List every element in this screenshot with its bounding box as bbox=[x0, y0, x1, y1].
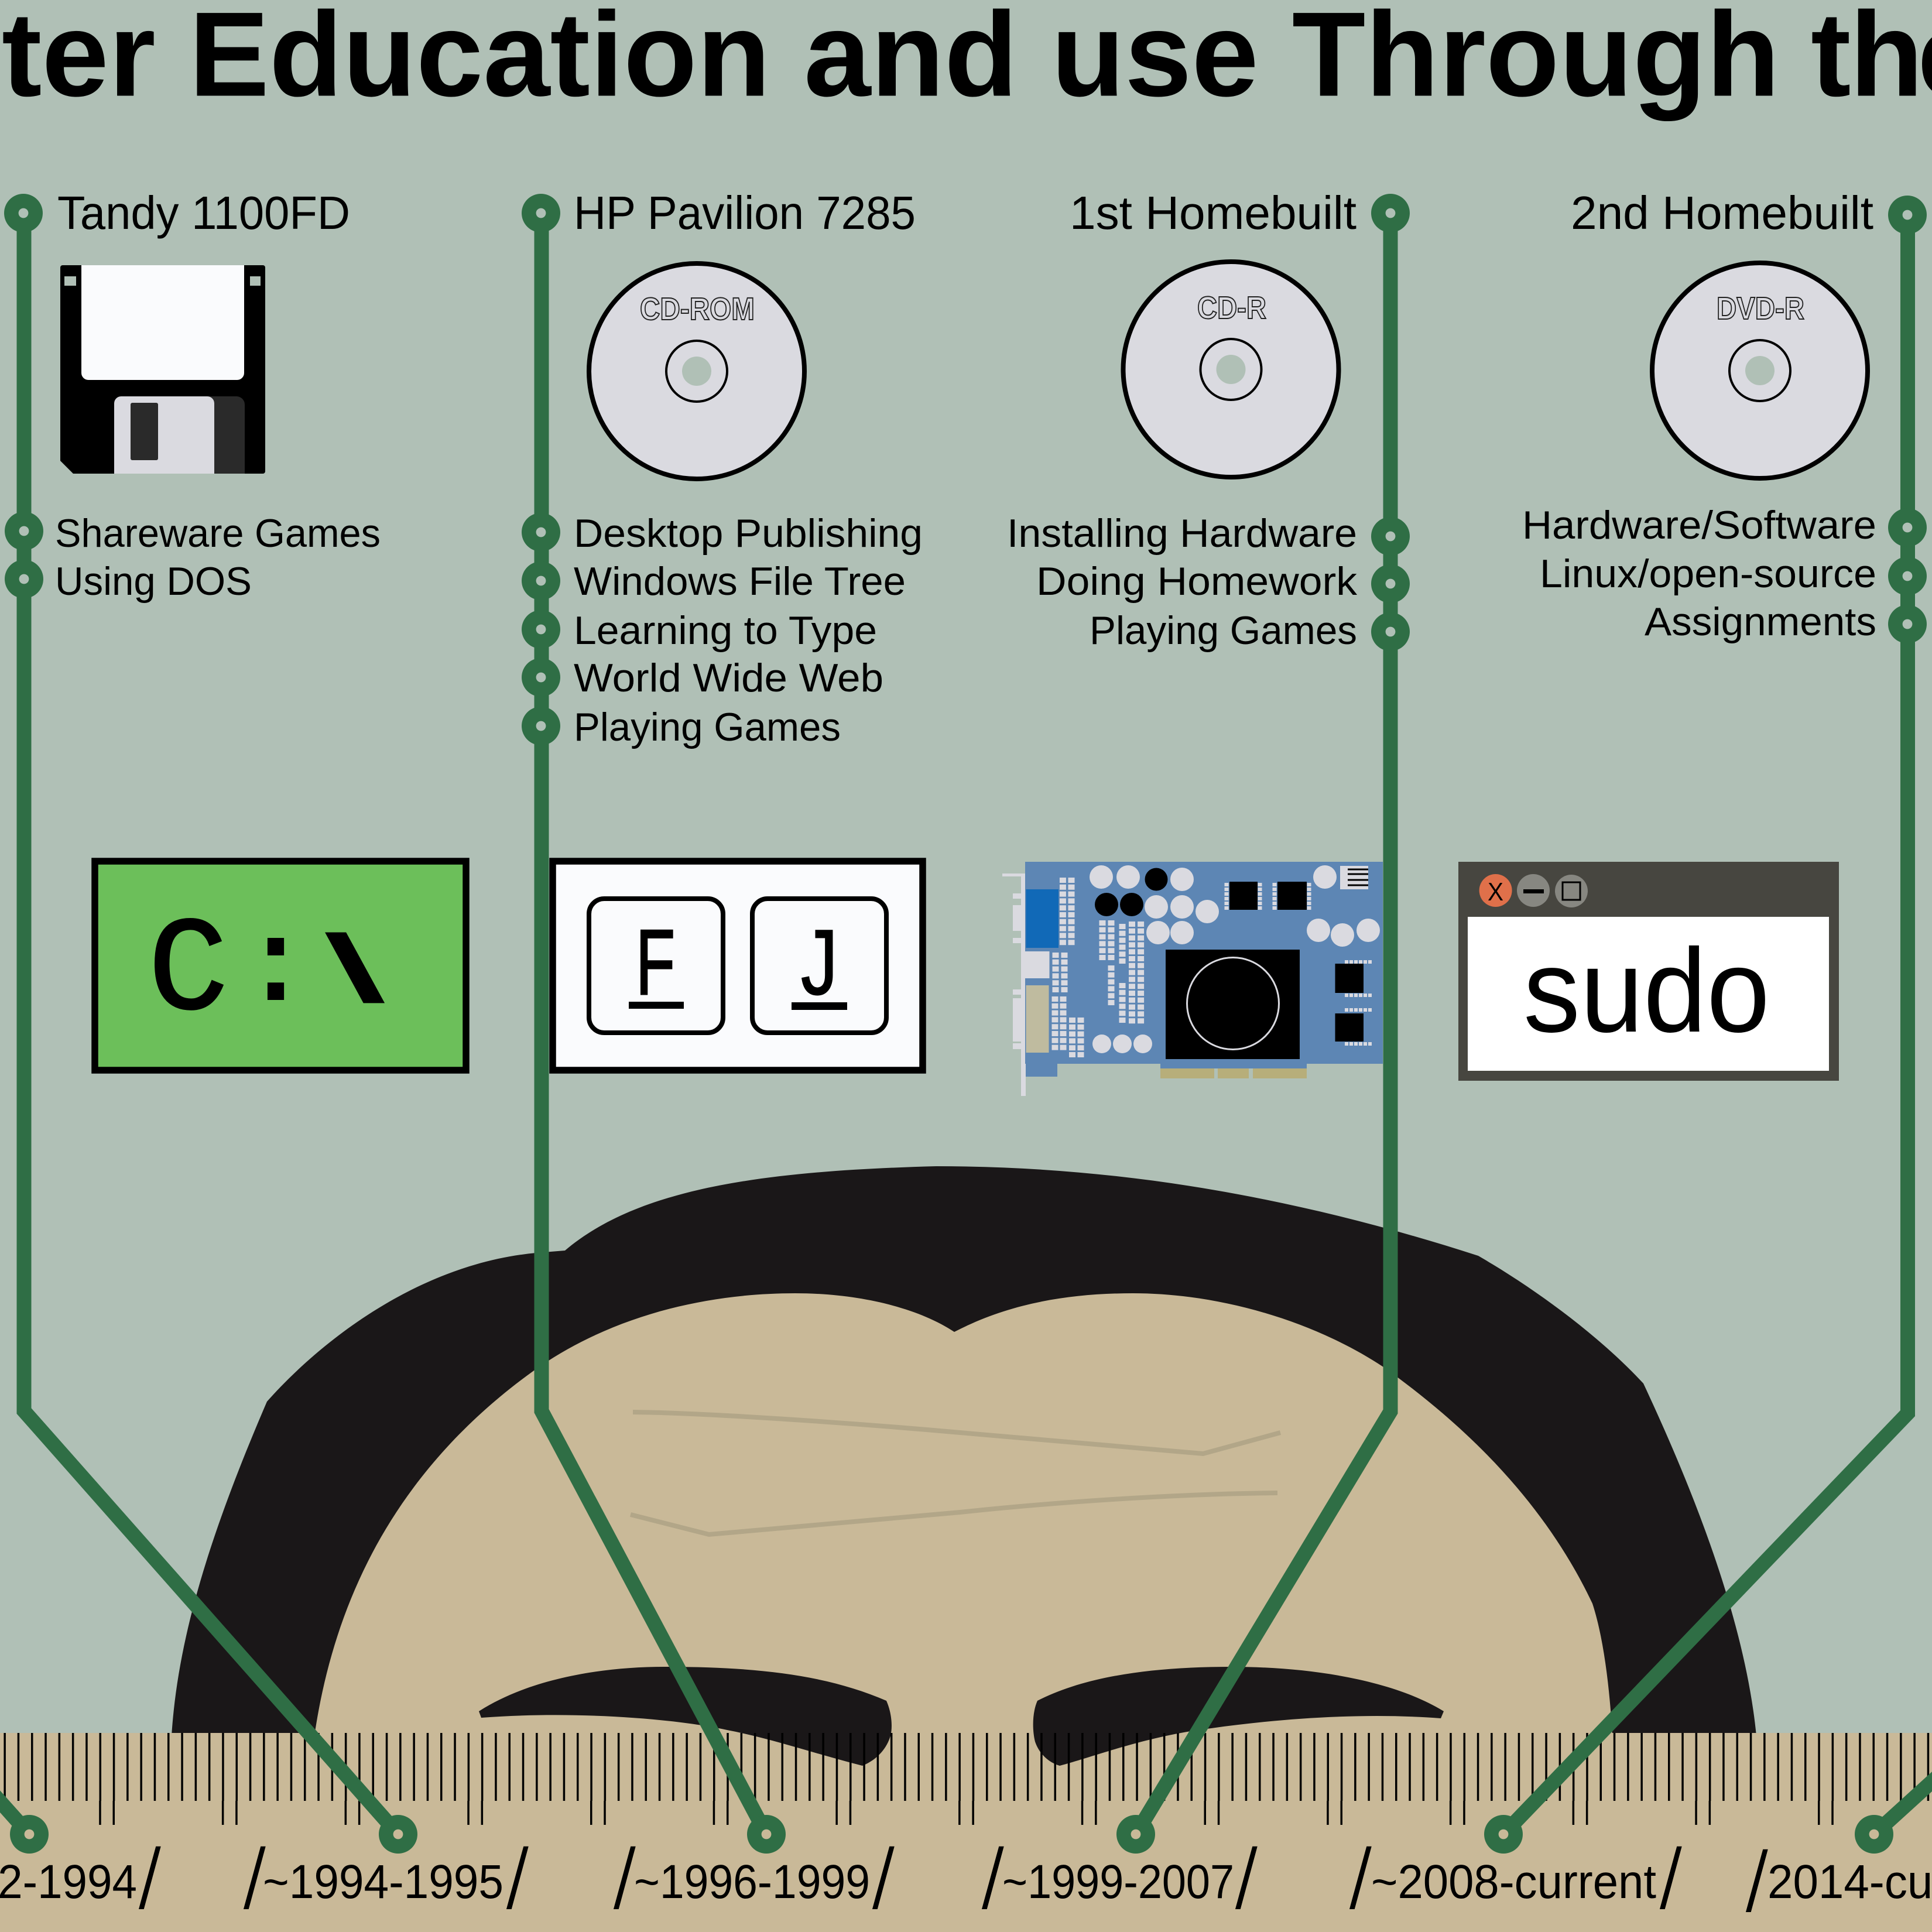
date label: 1996-1999 bbox=[612, 1830, 896, 1928]
date label: 1994-1995: ~1994-1995 bbox=[263, 1855, 503, 1909]
date label: 1996-1999: / bbox=[871, 1830, 896, 1928]
icon: terminal window with sudo bbox=[1458, 862, 1839, 1081]
icon: CD-ROM: CD-ROM bbox=[640, 292, 755, 327]
activities list: Doing Homework bbox=[1036, 559, 1358, 604]
activities list: Playing Games bbox=[1090, 608, 1357, 653]
activities list bbox=[574, 511, 923, 749]
date label: 2008-current: ~2008-current bbox=[1371, 1855, 1656, 1909]
date label: 1994-1995: / bbox=[242, 1830, 267, 1928]
date label: 1996-1999: ~1996-1999 bbox=[634, 1855, 870, 1909]
timeline nodes bbox=[1484, 196, 1927, 1854]
icon: F and J home-row keys: F bbox=[636, 911, 675, 1014]
forehead bbox=[314, 1293, 1612, 1736]
activities list: Desktop Publishing bbox=[574, 511, 923, 556]
date label: 2014-current: / bbox=[1745, 1832, 1769, 1931]
circuit board bbox=[1025, 862, 1383, 1077]
date label: 2008-current: / bbox=[1348, 1830, 1373, 1928]
activities list: Assignments bbox=[1645, 600, 1876, 644]
icon: F and J home-row keys bbox=[553, 861, 923, 1070]
timeline nodes bbox=[4, 194, 417, 1854]
port connectors bbox=[1026, 889, 1059, 948]
heading: Tandy 1100FD bbox=[57, 187, 350, 239]
solder pads bbox=[1055, 878, 1141, 1058]
activities list: Windows File Tree bbox=[574, 559, 906, 604]
icon: CD-R bbox=[1123, 262, 1338, 477]
activities list: Shareware Games bbox=[55, 511, 381, 556]
icon: DVD-R bbox=[1652, 263, 1868, 478]
icon: C prompt: \ bbox=[330, 929, 379, 1022]
date label: 1999-2007 bbox=[981, 1830, 1259, 1928]
panel: HP Pavilion 7285 bbox=[522, 187, 923, 1854]
panel: Tandy 1100FD bbox=[4, 187, 466, 1854]
capacitors bbox=[1090, 865, 1380, 1053]
date label: 1999-2007: ~1999-2007 bbox=[1002, 1855, 1234, 1909]
date label: 2008-current: / bbox=[1659, 1830, 1683, 1928]
ruler ticks bbox=[0, 1767, 1932, 1813]
activities list: Hardware/Software bbox=[1522, 503, 1876, 547]
timeline connector bbox=[1503, 215, 1907, 1834]
timeline nodes bbox=[1116, 194, 1410, 1854]
hair bbox=[172, 1166, 1756, 1736]
forehead wrinkle upper bbox=[633, 1412, 1280, 1454]
date label: 1999-2007: / bbox=[981, 1830, 1005, 1928]
icon: C prompt bbox=[95, 861, 466, 1070]
date labels bbox=[0, 1830, 1932, 1931]
timeline nodes bbox=[522, 194, 786, 1854]
date label: 1999-2007: / bbox=[1234, 1830, 1259, 1928]
date label: 1994-1995 bbox=[242, 1830, 530, 1928]
icon: C prompt: : bbox=[241, 903, 311, 1036]
timeline connector bbox=[1136, 213, 1390, 1834]
icon: CD-R: CD-R bbox=[1197, 290, 1266, 326]
date label: 2008-current bbox=[1348, 1830, 1683, 1928]
icon: floppy disk bbox=[60, 265, 265, 474]
heading: 2nd Homebuilt bbox=[1571, 187, 1873, 239]
date label: 1996-1999: / bbox=[612, 1830, 637, 1928]
icon: terminal window with sudo: sudo bbox=[1523, 924, 1770, 1057]
eyebrows bbox=[479, 1667, 1444, 1766]
date label: 1992-1994 bbox=[0, 1830, 162, 1928]
timeline connector bbox=[542, 213, 766, 1834]
icon: terminal window with sudo: X bbox=[1488, 878, 1503, 906]
heading: 1st Homebuilt bbox=[1070, 187, 1356, 239]
right eyebrow bbox=[1033, 1667, 1444, 1766]
timeline off-canvas connector right bbox=[1855, 1718, 1932, 1854]
panel: 2nd Homebuilt bbox=[1458, 187, 1927, 1854]
activities list bbox=[1007, 511, 1358, 653]
activities list: Playing Games bbox=[574, 705, 841, 749]
activities list: Linux/open-source bbox=[1540, 551, 1876, 596]
illustration: face peeking over the ruler bbox=[172, 1166, 1756, 1736]
icon: F and J home-row keys: J bbox=[801, 911, 838, 1014]
activities list: Installing Hardware bbox=[1007, 511, 1357, 556]
icon: graphics card bbox=[1002, 862, 1383, 1096]
activities list: Learning to Type bbox=[574, 608, 877, 653]
activities list: World Wide Web bbox=[574, 656, 883, 700]
icon: DVD-R: DVD-R bbox=[1717, 291, 1804, 326]
date label: 1994-1995: / bbox=[505, 1830, 530, 1928]
heading: HP Pavilion 7285 bbox=[574, 187, 916, 239]
activities list bbox=[55, 511, 381, 604]
BIOS label bbox=[1340, 866, 1368, 889]
timeline connector bbox=[24, 213, 398, 1834]
date label: 1992-1994: / bbox=[138, 1830, 162, 1928]
forehead wrinkle lower bbox=[631, 1493, 1277, 1534]
activities list bbox=[1522, 503, 1876, 644]
left eyebrow bbox=[479, 1667, 892, 1766]
memory chips bbox=[1229, 882, 1364, 1042]
edge contacts bbox=[1160, 1068, 1307, 1078]
icon: CD-ROM bbox=[589, 263, 804, 479]
activities list: Using DOS bbox=[55, 559, 252, 604]
panel: 1st Homebuilt bbox=[1002, 187, 1410, 1854]
ruler band bbox=[0, 1733, 1932, 1932]
card bracket bbox=[1002, 873, 1026, 1096]
timeline off-canvas connector left bbox=[0, 1670, 49, 1854]
date label: 2014-current bbox=[1745, 1832, 1932, 1931]
GPU chip bbox=[1166, 950, 1300, 1059]
icon: C prompt: C bbox=[148, 898, 228, 1049]
